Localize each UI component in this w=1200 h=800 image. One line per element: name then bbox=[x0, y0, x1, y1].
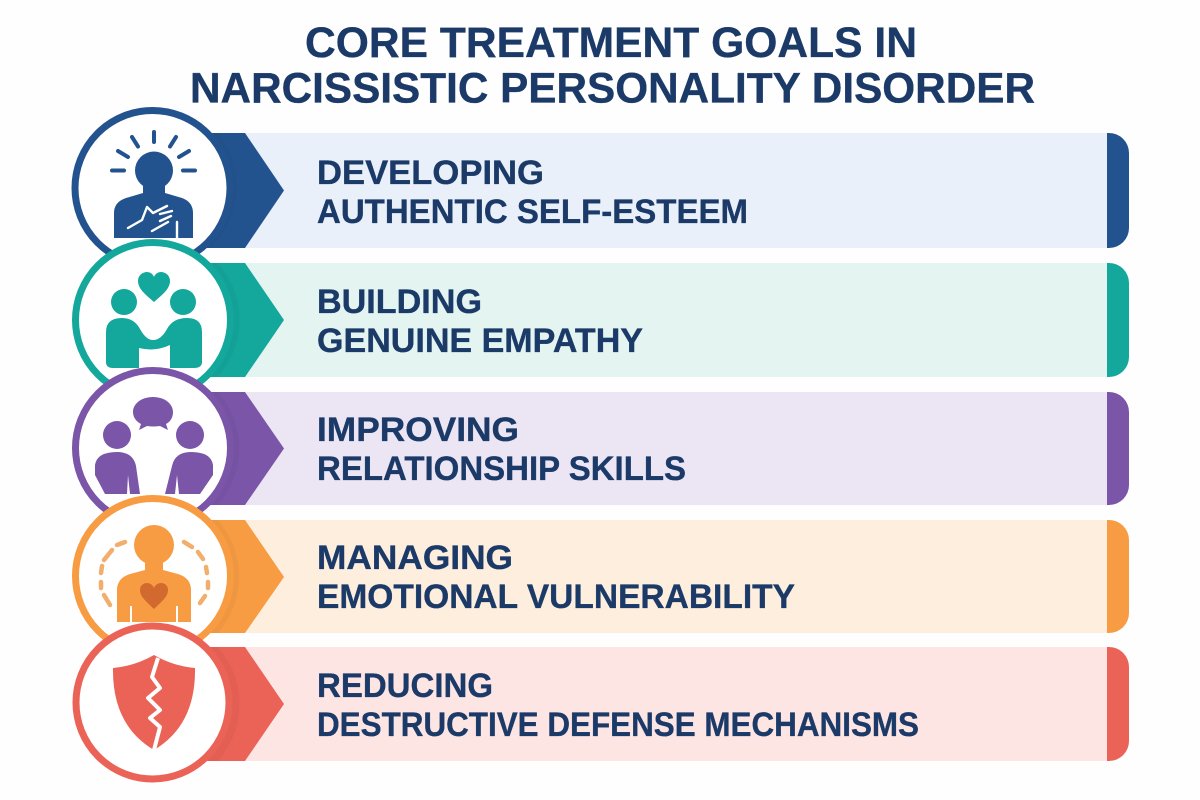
bar end cap bbox=[1107, 263, 1129, 377]
arrow tab bbox=[200, 647, 284, 761]
arrow shade bbox=[200, 263, 240, 377]
goal text bbox=[317, 283, 643, 360]
bar end cap bbox=[1107, 133, 1129, 248]
arrow tab bbox=[200, 392, 284, 505]
goal text bbox=[317, 539, 795, 616]
panel: developing authentic self-esteem bbox=[200, 133, 1129, 248]
bar end cap bbox=[1107, 647, 1129, 761]
arrow shade bbox=[200, 647, 240, 761]
goal text: AUTHENTIC SELF-ESTEEM bbox=[317, 193, 748, 231]
arrow tab bbox=[200, 263, 284, 377]
goal text bbox=[317, 667, 919, 744]
goal text: DEVELOPING bbox=[317, 154, 544, 192]
arrow shade bbox=[200, 392, 239, 505]
title bbox=[190, 19, 1035, 112]
icon: two people and heart bbox=[76, 242, 230, 398]
goal text: GENUINE EMPATHY bbox=[317, 322, 643, 360]
goal text: BUILDING bbox=[317, 283, 482, 321]
title: NARCISSISTIC PERSONALITY DISORDER bbox=[190, 64, 1035, 112]
panel: reducing destructive defense mechanisms bbox=[200, 647, 1129, 761]
arrow tab bbox=[200, 520, 284, 633]
goal text: RELATIONSHIP SKILLS bbox=[317, 450, 686, 488]
goal text: EMOTIONAL VULNERABILITY bbox=[317, 578, 795, 616]
icon: person with hand on heart bbox=[75, 110, 230, 266]
bar background bbox=[200, 133, 1107, 248]
bar background bbox=[200, 392, 1107, 505]
icon: cracked shield bbox=[76, 626, 229, 779]
arrow tab bbox=[200, 133, 284, 248]
arrow shade bbox=[200, 520, 239, 633]
bar end cap bbox=[1107, 520, 1129, 633]
panel: improving relationship skills bbox=[200, 392, 1129, 505]
goal text: DESTRUCTIVE DEFENSE MECHANISMS bbox=[317, 706, 919, 744]
bar background bbox=[200, 263, 1107, 377]
icon: two people with speech bubble bbox=[76, 370, 230, 526]
goal text bbox=[317, 411, 686, 488]
title: CORE TREATMENT GOALS IN bbox=[305, 19, 917, 67]
panel: building genuine empathy bbox=[200, 263, 1129, 377]
goal text: MANAGING bbox=[317, 539, 513, 577]
goal text: REDUCING bbox=[317, 667, 493, 705]
bar background bbox=[200, 647, 1107, 761]
bar background bbox=[200, 520, 1107, 633]
icon: person with heart and dashed aura bbox=[76, 498, 230, 654]
arrow shade bbox=[200, 133, 237, 248]
panel: managing emotional vulnerability bbox=[200, 520, 1129, 633]
goal text bbox=[317, 154, 748, 231]
goal text: IMPROVING bbox=[317, 411, 519, 449]
bar end cap bbox=[1107, 392, 1129, 505]
